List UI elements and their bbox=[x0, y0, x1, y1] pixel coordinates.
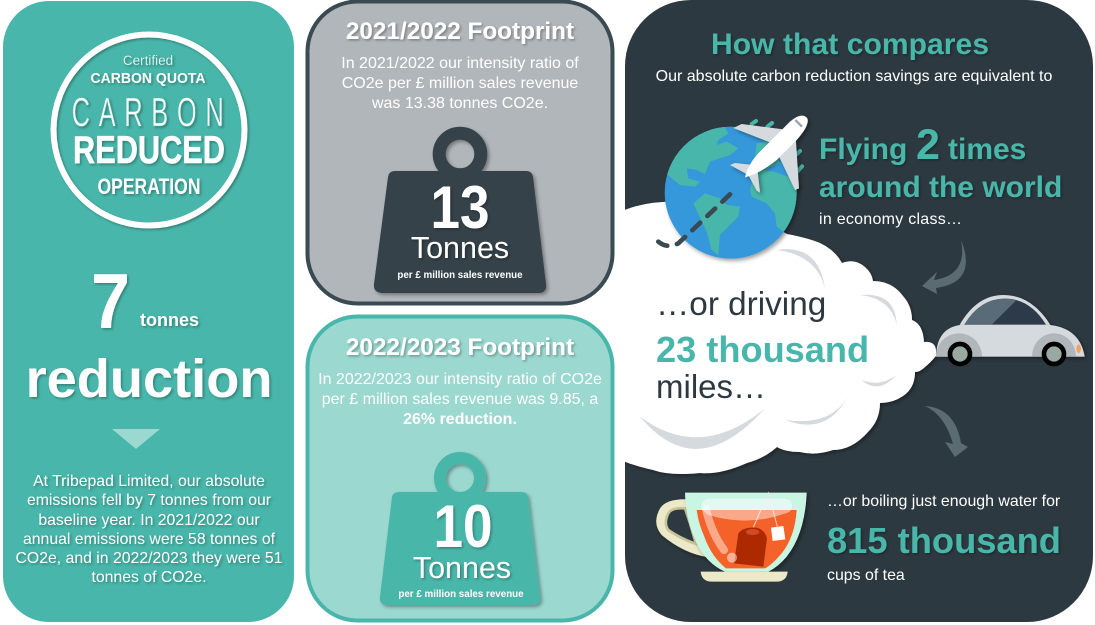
text block: per £ million sales revenue was 9.85, a bbox=[322, 391, 598, 408]
badge text: certified: Certified bbox=[123, 53, 173, 68]
panel background bbox=[308, 316, 612, 620]
heading: How that compares bbox=[711, 28, 989, 61]
handle hole bbox=[666, 508, 696, 544]
text block: emissions summary: annual emissions were 58 tonnes of bbox=[23, 531, 276, 548]
panel background bbox=[308, 2, 612, 304]
badge ring bbox=[54, 34, 244, 226]
unit tonnes: tonnes bbox=[140, 310, 199, 330]
cloud shading arcs bbox=[640, 249, 897, 449]
panel background bbox=[625, 0, 1093, 622]
text block: In 2022/2023 our intensity ratio of CO2e bbox=[318, 371, 602, 388]
flight path dashes bbox=[658, 194, 730, 246]
line: or driving: …or driving bbox=[656, 286, 826, 323]
badge text: carbon: CARBON bbox=[72, 90, 232, 136]
text block: emissions summary: tonnes of CO2e. bbox=[91, 569, 207, 586]
illustration: cloud bbox=[620, 201, 936, 474]
weight shape bbox=[380, 458, 540, 605]
engine trails bbox=[752, 121, 802, 172]
panel: 2022/2023 footprint bbox=[308, 316, 612, 620]
teabag highlight bbox=[746, 529, 759, 535]
arrow: to car bbox=[922, 240, 966, 294]
number: 10 bbox=[434, 493, 492, 560]
cup bbox=[685, 493, 807, 572]
line: miles: miles… bbox=[656, 368, 766, 405]
window highlight bbox=[964, 299, 1016, 325]
teabag string bbox=[753, 493, 777, 527]
badge text: operation: OPERATION bbox=[98, 174, 200, 199]
line: cups of tea: cups of tea bbox=[827, 567, 905, 584]
text block: tea bbox=[827, 493, 1061, 584]
tea bbox=[697, 510, 797, 568]
saucer bbox=[701, 572, 788, 582]
caption: per £ million sales revenue bbox=[398, 589, 524, 600]
panel: how that compares bbox=[620, 0, 1093, 622]
number 7: 7 bbox=[91, 257, 130, 345]
glass highlights bbox=[701, 499, 792, 521]
stat: 7 tonnes bbox=[91, 257, 199, 345]
text block: was 13.38 tonnes CO2e. bbox=[371, 95, 548, 112]
unit: Tonnes bbox=[411, 231, 509, 265]
wheel arches bbox=[936, 333, 982, 357]
icon: cup of tea bbox=[656, 493, 807, 582]
text block: 26% reduction. bbox=[403, 411, 517, 428]
text block: emissions summary bbox=[16, 473, 283, 586]
text block bbox=[341, 55, 579, 112]
panel background bbox=[3, 1, 294, 622]
heading: reduction: reduction bbox=[26, 349, 272, 409]
badge: carbon reduced operation bbox=[54, 34, 244, 226]
badge text: reduced: REDUCED bbox=[73, 129, 225, 172]
handle bbox=[656, 499, 708, 557]
icon: down triangle bbox=[112, 429, 160, 449]
text block: driving bbox=[656, 286, 869, 405]
heading: 2021/2022 Footprint bbox=[346, 18, 574, 45]
light bbox=[1076, 344, 1081, 353]
continents bbox=[662, 125, 798, 255]
line: boiling water: …or boiling just enough water for bbox=[827, 493, 1061, 510]
icon: weight 10 tonnes bbox=[380, 458, 540, 605]
icon: weight 13 tonnes bbox=[374, 133, 546, 293]
line: flying 2 times: Flying bbox=[819, 133, 907, 166]
tag bbox=[771, 526, 785, 541]
arrow: to tea bbox=[925, 406, 968, 457]
text block: In 2021/2022 our intensity ratio of bbox=[341, 55, 579, 72]
subheading: Our absolute carbon reduction savings are equivalent to bbox=[656, 68, 1052, 85]
text block: emissions summary: baseline year. In 2021/2022 our bbox=[38, 512, 260, 529]
caption: economy class: in economy class… bbox=[819, 211, 962, 228]
line: flying 2 times: times bbox=[948, 133, 1026, 166]
teabag bbox=[734, 528, 767, 567]
panel: carbon reduction summary bbox=[3, 1, 294, 622]
heading: 2022/2023 Footprint bbox=[346, 334, 574, 361]
body bbox=[936, 325, 1085, 357]
text block: CO2e per £ million sales revenue bbox=[342, 75, 578, 92]
caption: per £ million sales revenue bbox=[397, 270, 523, 281]
text block: emissions summary: At Tribepad Limited, our absolute bbox=[33, 473, 265, 490]
icon: car bbox=[936, 295, 1085, 364]
globe bbox=[665, 127, 797, 259]
line: flying 2 times: 2 bbox=[916, 121, 940, 169]
number: 13 bbox=[430, 174, 490, 241]
text block: emissions summary: emissions fell by 7 tonnes from our bbox=[27, 492, 271, 509]
weight shape bbox=[374, 133, 546, 293]
text block: emissions summary: CO2e, and in 2022/2023 they were 51 bbox=[16, 550, 283, 567]
line: around the world: around the world bbox=[819, 171, 1062, 204]
panel: 2021/2022 footprint bbox=[308, 2, 612, 304]
text block bbox=[318, 371, 602, 428]
window bbox=[964, 299, 1046, 325]
wheels bbox=[950, 344, 970, 364]
unit: Tonnes bbox=[413, 551, 511, 585]
text block: flying bbox=[819, 121, 1062, 204]
line: 815 thousand: 815 thousand bbox=[827, 520, 1061, 561]
airplane bbox=[730, 116, 808, 193]
cloud shape bbox=[620, 201, 936, 474]
icon: globe and plane bbox=[658, 116, 808, 259]
line: 23 thousand: 23 thousand bbox=[656, 329, 869, 370]
badge text: carbon quota: CARBON QUOTA bbox=[90, 71, 206, 87]
roof bbox=[959, 295, 1051, 325]
